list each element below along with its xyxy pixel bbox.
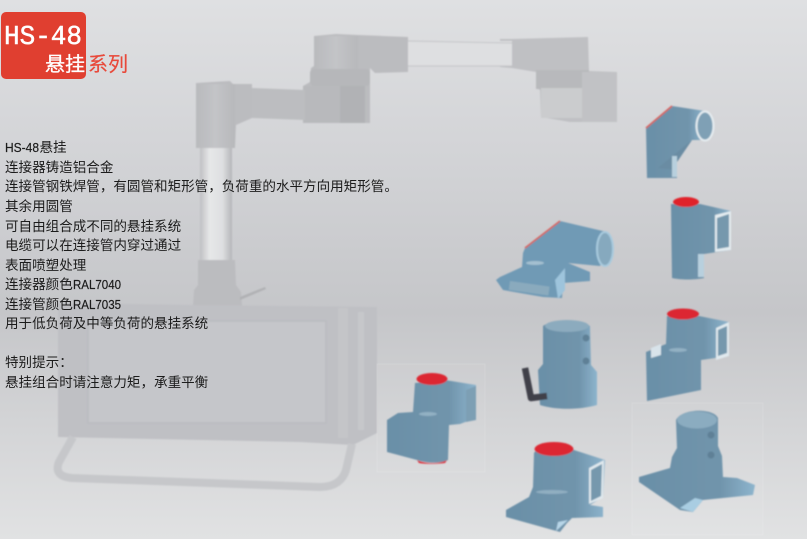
description text: 其余用圆管: [5, 195, 73, 215]
part: rectangular elbow connector: [671, 197, 731, 280]
description text: RAL7035: [73, 297, 121, 312]
handle: [58, 437, 352, 487]
elbow: [196, 81, 252, 148]
title badge: 系列: [88, 48, 128, 77]
faint image panels: [377, 364, 763, 535]
description text: 用于低负荷及中等负荷的悬挂系统: [5, 312, 208, 332]
description text: 连接管颜色: [5, 293, 73, 313]
faded suspension arm illustration: [58, 34, 617, 487]
middle joint: [303, 34, 408, 123]
title badge: [1, 12, 128, 79]
part: wall-plate connector with rectangular arm: [646, 308, 729, 401]
part: lower-left wall-plate connector: [387, 373, 476, 464]
description text: 连接器铸造铝合金: [5, 156, 114, 176]
description text: 表面喷塑处理: [5, 254, 87, 274]
part: angled base connector: [496, 221, 613, 299]
title badge: HS-48: [4, 23, 82, 53]
lever handle: [525, 368, 547, 398]
right joint: [500, 37, 617, 122]
lower collar: [193, 260, 242, 306]
vertical tube: [200, 148, 232, 260]
description text: 特别提示：: [5, 351, 73, 371]
description text: RAL7040: [73, 277, 121, 292]
part: round elbow connector: [646, 106, 714, 178]
description text: 悬挂组合时请注意力矩，承重平衡: [5, 371, 208, 391]
part: tube connector with lever: [525, 320, 597, 409]
description text: 电缆可以在连接管内穿过通过: [5, 234, 182, 254]
part: flanged base with round socket: [639, 411, 755, 512]
description text: 悬挂: [40, 136, 67, 156]
description text: 可自由组合成不同的悬挂系统: [5, 215, 181, 235]
description text: HS-48: [5, 140, 39, 155]
horizontal rectangular tube: [408, 41, 512, 66]
part: flanged base with rectangular arm: [506, 442, 605, 532]
description text: 连接器颜色: [5, 273, 73, 293]
left horizontal arm: [252, 88, 305, 120]
monitor box: [58, 303, 377, 445]
title badge: 悬挂: [45, 48, 85, 77]
description text: 连接管钢铁焊管，有圆管和矩形管，负荷重的水平方向用矩形管。: [5, 175, 398, 195]
description text: [5, 136, 398, 391]
